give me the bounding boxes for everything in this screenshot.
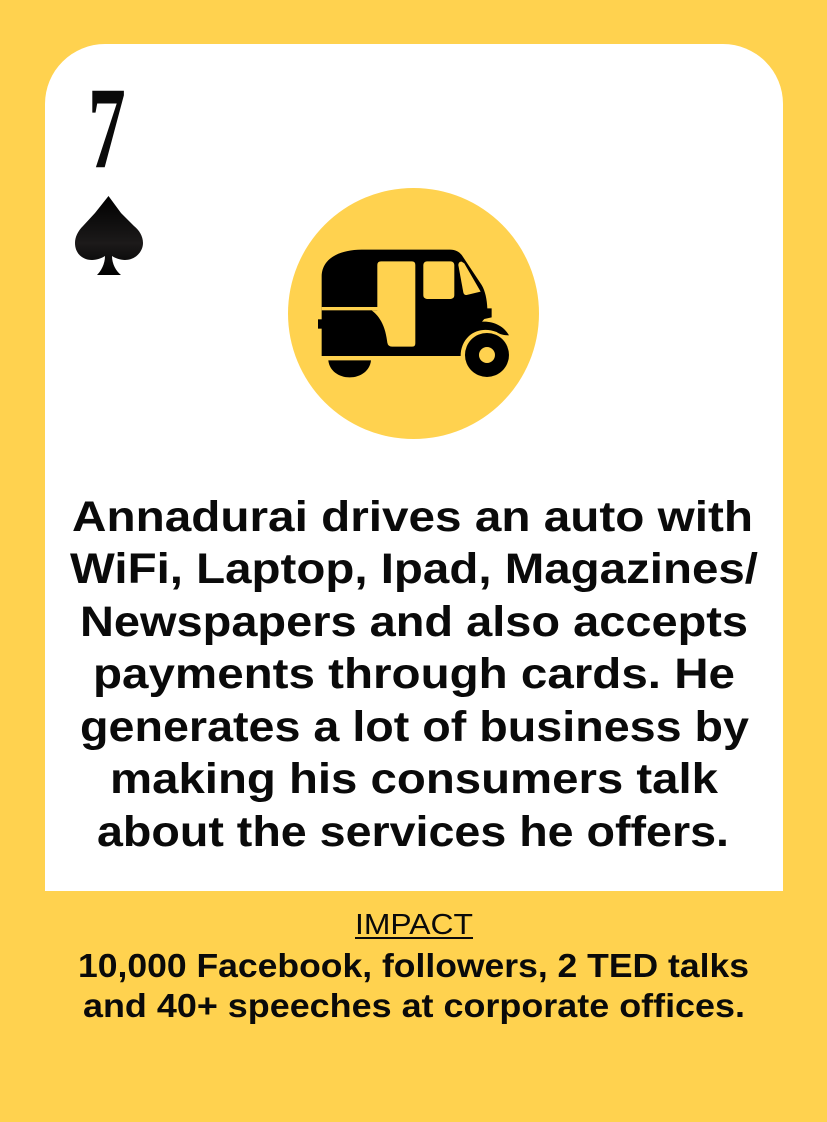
main story text: Newspapers and also accepts — [80, 598, 748, 646]
impact text: and 40+ speeches at corporate offices. — [83, 987, 745, 1024]
icon: yellow circle with auto rickshaw — [288, 188, 539, 439]
main story text: WiFi, Laptop, Ipad, Magazines/ — [70, 545, 758, 593]
panel: white playing card — [45, 44, 783, 891]
main story text: Annadurai drives an auto with — [72, 493, 753, 541]
card rank: 7: 7 — [88, 64, 126, 193]
main story text: generates a lot of business by — [80, 703, 749, 751]
main story text: payments through cards. He — [93, 650, 735, 698]
main story text: making his consumers talk — [110, 755, 718, 803]
impact text — [78, 947, 749, 1024]
impact heading: IMPACT — [355, 909, 473, 941]
icon: spade suit — [75, 196, 143, 275]
main story text — [70, 493, 758, 856]
impact text: 10,000 Facebook, followers, 2 TED talks — [78, 947, 749, 984]
main story text: about the services he offers. — [97, 808, 729, 856]
